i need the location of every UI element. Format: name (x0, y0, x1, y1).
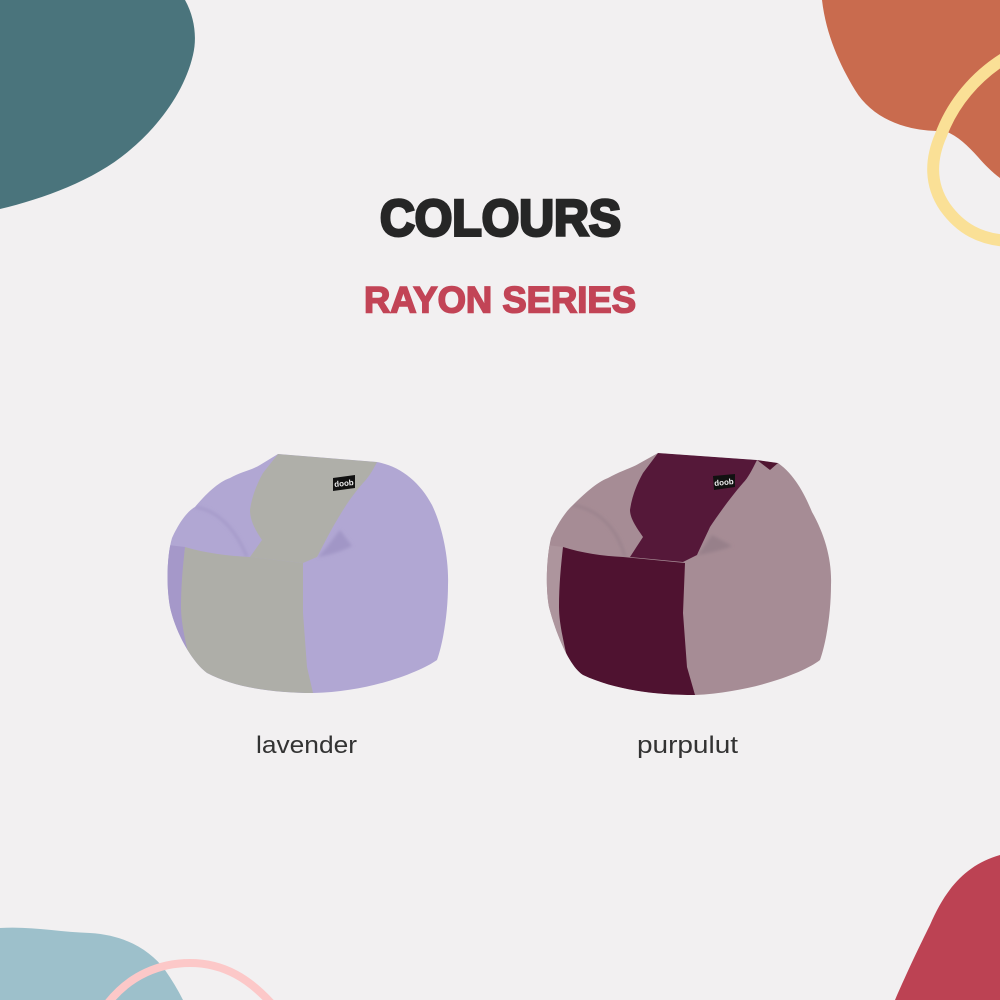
seat panel (559, 547, 695, 695)
label: lavender: lavender (256, 732, 357, 759)
subtitle: RAYON SERIES (364, 280, 636, 320)
brand tag: doob (714, 477, 734, 488)
back panel (250, 454, 377, 563)
blob: teal top left (0, 0, 195, 209)
label: purpulut: purpulut (637, 732, 738, 759)
blob: red bottom right (895, 855, 1000, 1000)
brand tag (333, 475, 355, 491)
bag body (540, 445, 835, 700)
bean bag: purpulut (540, 445, 835, 700)
arc: pink bottom left (108, 963, 271, 1000)
brand tag: doob (334, 478, 354, 489)
ring: yellow outline top right (933, 55, 1000, 241)
back panel (630, 453, 757, 562)
brand tag (713, 474, 735, 490)
bean bag: lavender (168, 454, 448, 693)
title: COLOURS (380, 190, 621, 246)
blob: light blue bottom left (0, 928, 183, 1000)
bag body (168, 454, 448, 693)
seat panel (181, 547, 313, 693)
blob: orange top right (822, 0, 1000, 178)
